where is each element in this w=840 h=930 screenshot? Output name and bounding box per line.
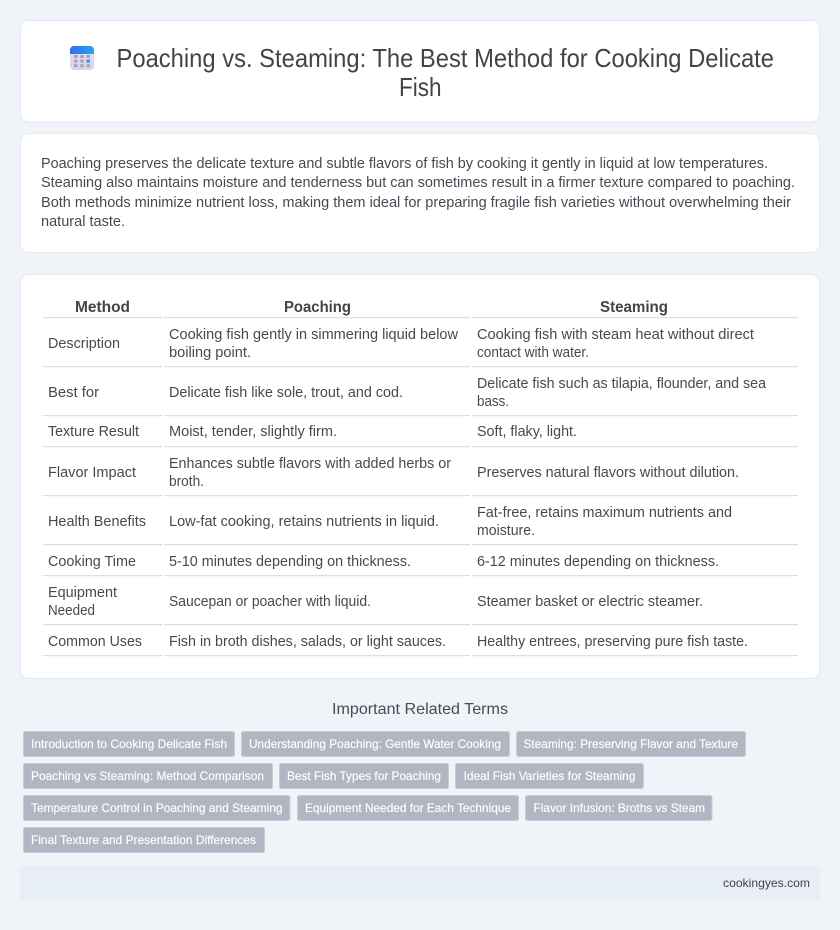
tag list: related terms: Temperature Control in Poaching and Steaming	[31, 801, 282, 815]
row: common uses: Fish in broth dishes, salads, or light sauces.	[169, 634, 446, 650]
panel: comparison table	[20, 274, 820, 678]
tag list: related terms: Best Fish Types for Poaching	[287, 769, 441, 783]
row: cooking time	[48, 554, 719, 570]
tag list: related terms: Flavor Infusion: Broths vs Steam	[534, 801, 705, 815]
tag list: related terms: Final Texture and Presentation Differences	[31, 833, 256, 847]
title	[116, 45, 774, 102]
tag list: related terms: Poaching vs Steaming: Method Comparison	[31, 769, 264, 783]
row: health benefits: moisture.	[477, 523, 535, 539]
row: best for	[48, 376, 766, 410]
text block: introduction: Both methods minimize nutrient loss, making them ideal for preparing fragile fish varieties without overwhelming their	[41, 195, 791, 211]
tag list: related terms: Understanding Poaching: Gentle Water Cooking	[249, 737, 501, 751]
row: flavor impact	[48, 456, 739, 490]
row: texture result: Moist, tender, slightly firm.	[169, 424, 337, 440]
row: common uses: Healthy entrees, preserving pure fish taste.	[477, 634, 748, 650]
row: description: Cooking fish gently in simmering liquid below	[169, 327, 459, 343]
row: health benefits: Health Benefits	[48, 514, 146, 530]
tag list: related terms: Introduction to Cooking Delicate Fish	[31, 737, 227, 751]
row: flavor impact: Enhances subtle flavors with added herbs or	[169, 456, 451, 472]
footer: cookingyes.com	[723, 876, 810, 890]
row: equipment needed	[48, 585, 703, 619]
row: description: contact with water.	[477, 345, 589, 361]
footer	[20, 866, 820, 900]
row: texture result	[48, 424, 577, 440]
tag list: related terms	[24, 732, 746, 852]
text block: introduction: Poaching preserves the delicate texture and subtle flavors of fish by cooking it gently in liquid at low temperatures.	[41, 156, 768, 172]
panel: introduction	[20, 134, 820, 252]
row: description: Cooking fish with steam heat without direct	[477, 327, 754, 343]
row: flavor impact: broth.	[169, 474, 204, 490]
title: Poaching vs. Steaming: The Best Method for Cooking Delicate	[116, 45, 774, 73]
text block: introduction: Steaming also maintains moisture and tenderness but can sometimes result in a firmer texture compared to poaching.	[41, 175, 795, 191]
row: health benefits: Fat-free, retains maximum nutrients and	[477, 505, 732, 521]
title: Fish	[399, 74, 442, 102]
row: common uses	[48, 634, 748, 650]
row: description	[48, 327, 754, 361]
row: cooking time: Cooking Time	[48, 554, 136, 570]
table header: Method	[75, 299, 130, 316]
text block: introduction: natural taste.	[41, 214, 125, 230]
row: equipment needed: Saucepan or poacher with liquid.	[169, 594, 371, 610]
row: equipment needed: Equipment	[48, 585, 117, 601]
row: health benefits	[48, 505, 732, 539]
tag list: related terms: Steaming: Preserving Flavor and Texture	[524, 737, 738, 751]
panel: title header	[20, 20, 820, 122]
row: cooking time: 5-10 minutes depending on thickness.	[169, 554, 411, 570]
row: best for: Delicate fish such as tilapia, flounder, and sea	[477, 376, 766, 392]
tag list: related terms: Equipment Needed for Each Technique	[305, 801, 511, 815]
table header	[75, 299, 668, 316]
row: common uses: Common Uses	[48, 634, 142, 650]
heading: important related terms: Important Related Terms	[332, 701, 508, 718]
row: best for: Best for	[48, 385, 99, 401]
row: texture result: Texture Result	[48, 424, 139, 440]
row: texture result: Soft, flaky, light.	[477, 424, 577, 440]
row: equipment needed: Steamer basket or electric steamer.	[477, 594, 703, 610]
row: flavor impact: Preserves natural flavors without dilution.	[477, 465, 739, 481]
row: health benefits: Low-fat cooking, retains nutrients in liquid.	[169, 514, 439, 530]
table header: Poaching	[284, 299, 351, 316]
row: best for: bass.	[477, 394, 509, 410]
row: best for: Delicate fish like sole, trout, and cod.	[169, 385, 403, 401]
row: equipment needed: Needed	[48, 603, 95, 619]
row: description: Description	[48, 336, 120, 352]
row: flavor impact: Flavor Impact	[48, 465, 136, 481]
tag list: related terms: Ideal Fish Varieties for Steaming	[464, 769, 636, 783]
row: cooking time: 6-12 minutes depending on thickness.	[477, 554, 719, 570]
icon: calendar	[70, 46, 94, 70]
row: description: boiling point.	[169, 345, 251, 361]
table header: Steaming	[600, 299, 668, 316]
text block: introduction	[41, 156, 795, 230]
